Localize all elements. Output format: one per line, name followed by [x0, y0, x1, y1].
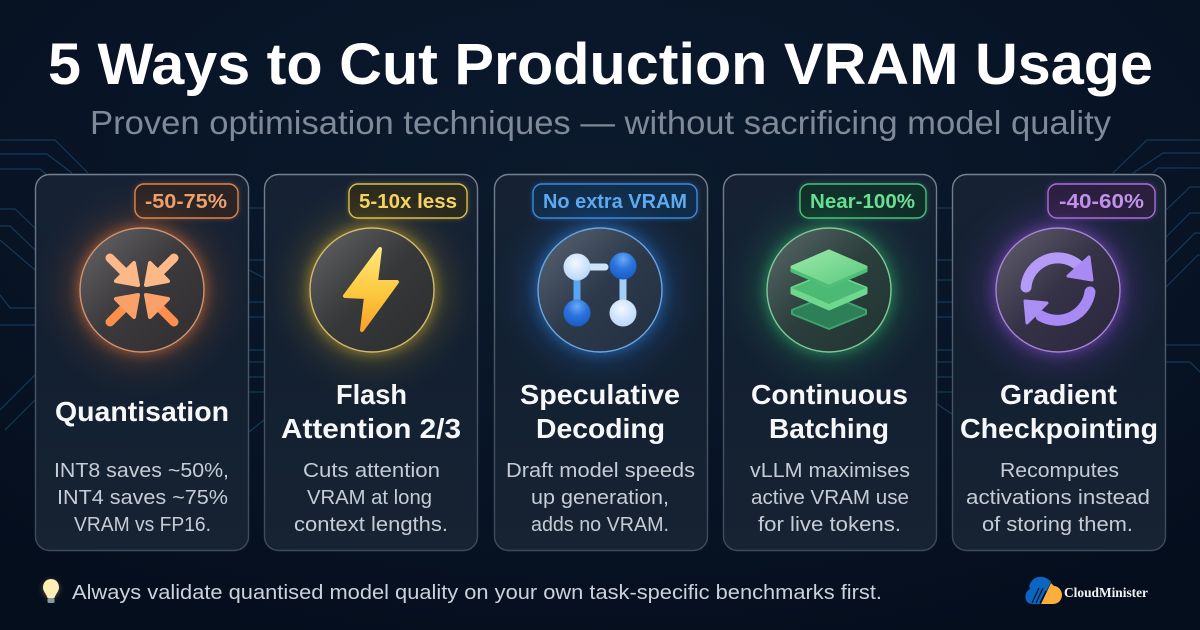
heading: Batching [769, 413, 889, 444]
icon: lightning bolt [300, 218, 444, 362]
panel: speculative decoding [494, 174, 708, 550]
badge: near-100%: Near-100% [810, 190, 915, 213]
description: Cuts attention [303, 459, 440, 482]
description [750, 459, 910, 536]
description: of storing them. [982, 513, 1133, 536]
description: Recomputes [1000, 459, 1119, 482]
icon: refresh arrows [986, 218, 1130, 362]
panel: continuous batching [724, 174, 936, 550]
title: 5 Ways to Cut Production VRAM Usage [48, 32, 1153, 97]
heading [960, 379, 1158, 444]
panel: flash attention [264, 174, 478, 550]
heading: Flash [336, 379, 407, 410]
heading: Speculative [520, 379, 680, 410]
circuit pattern [0, 140, 1200, 432]
footer note: Always validate quantised model quality on your own task-specific benchmarks first. [72, 581, 882, 604]
description [966, 459, 1150, 536]
description: Draft model speeds [506, 459, 695, 482]
logo: cloudminister [1025, 577, 1148, 604]
heading: Decoding [536, 413, 665, 444]
description: VRAM vs FP16. [74, 513, 211, 536]
heading [520, 379, 680, 444]
panel: quantisation [36, 174, 248, 550]
badge: no extra vram: No extra VRAM [543, 190, 687, 213]
description: context lengths. [294, 513, 448, 536]
description: activations instead [966, 486, 1150, 509]
badge: 5-10x less: 5-10x less [359, 190, 457, 213]
badge: -40-60% [1048, 184, 1155, 218]
badge: near-100% [800, 184, 926, 218]
description [54, 459, 229, 536]
description [506, 459, 695, 536]
icon: light bulb [43, 579, 59, 603]
badge: 5-10x less [349, 184, 467, 218]
description [294, 459, 448, 536]
heading [281, 379, 461, 444]
heading: Gradient [1000, 379, 1117, 410]
description: active VRAM use [751, 486, 909, 509]
description: INT8 saves ~50%, [54, 459, 229, 482]
icon: compress arrows [70, 218, 214, 362]
icon: connected nodes [528, 218, 672, 362]
heading [751, 379, 908, 444]
subtitle: Proven optimisation techniques — without sacrificing model quality [90, 105, 1111, 142]
panel: gradient checkpointing [952, 174, 1166, 550]
description: up generation, [531, 486, 669, 509]
heading: Checkpointing [960, 413, 1158, 444]
badge: -40-60%: -40-60% [1059, 190, 1144, 213]
logo: cloudminister: CloudMinister [1064, 586, 1148, 601]
badge: no extra vram [533, 184, 697, 218]
heading: Quantisation [55, 396, 229, 427]
heading: Attention 2/3 [281, 413, 461, 444]
icon: stacked layers [757, 218, 901, 362]
description: INT4 saves ~75% [57, 486, 228, 509]
badge: -50-75%: -50-75% [145, 190, 227, 213]
heading: Continuous [751, 379, 908, 410]
description: VRAM at long [307, 486, 432, 509]
description: vLLM maximises [750, 459, 910, 482]
badge: -50-75% [135, 184, 238, 218]
description: adds no VRAM. [531, 513, 669, 536]
description: for live tokens. [758, 513, 901, 536]
